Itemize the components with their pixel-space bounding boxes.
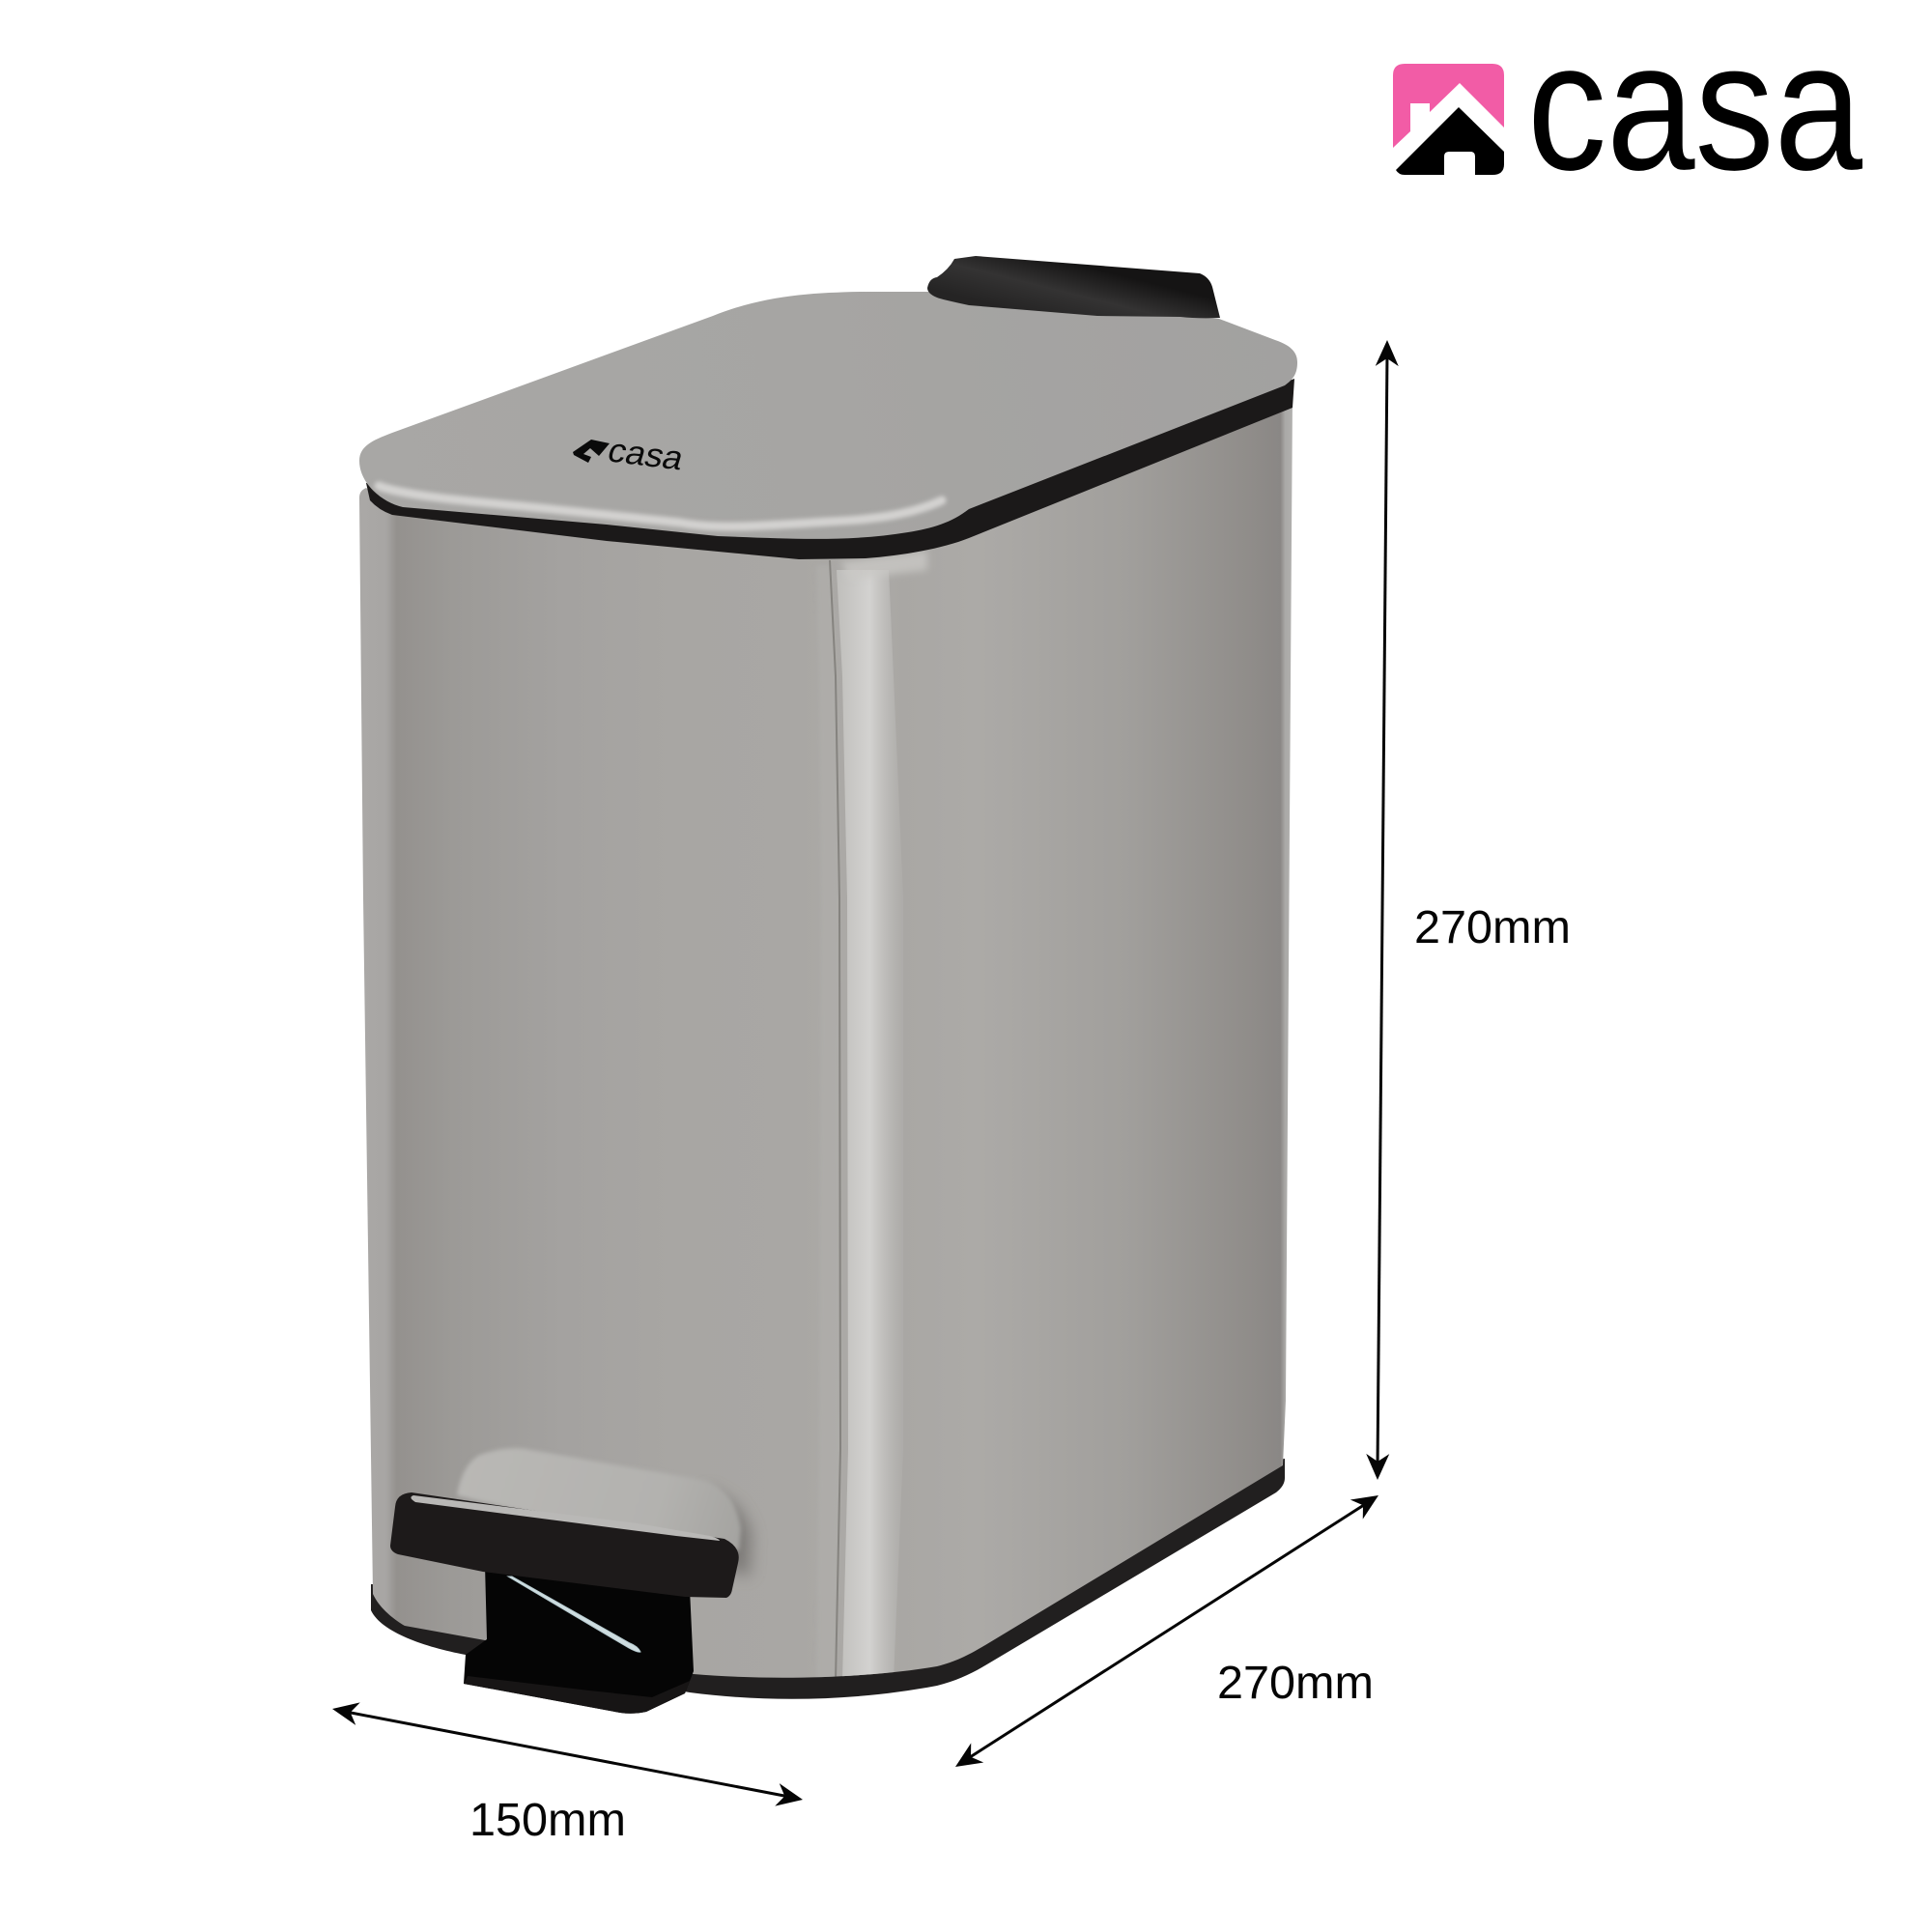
dimension arrow: width [330,1697,805,1811]
icon: small house [573,440,610,463]
product: stainless steel pedal bin [348,256,1304,1714]
dimension label: height: 270mm [1414,902,1571,953]
dimension label: width: 150mm [469,1795,626,1846]
foot pedal [390,1448,752,1714]
pedal stem and foot [464,1565,694,1714]
lid handle [927,256,1220,318]
lid [359,292,1297,539]
icon: black house [1396,107,1504,175]
pedal recess [457,1448,752,1577]
icon: pink roof square [1393,64,1504,148]
pedal silver strip [411,1495,720,1541]
lid printed logo [573,432,689,477]
bin body [348,386,1304,1700]
lid gasket [366,379,1294,559]
pedal foot edge [464,1676,690,1714]
dimension arrow: height [1366,340,1399,1480]
lid front rim highlight [379,486,942,526]
pedal spring wire [508,1577,640,1652]
logo wordmark: casa [1527,5,1863,209]
logo: casa [1393,5,1863,209]
dimension label: depth: 270mm [1217,1658,1374,1709]
pedal plate [390,1492,739,1598]
lid logo wordmark: casa [604,432,689,477]
bin base rim [371,1459,1285,1699]
dimension arrow: depth [950,1486,1384,1776]
